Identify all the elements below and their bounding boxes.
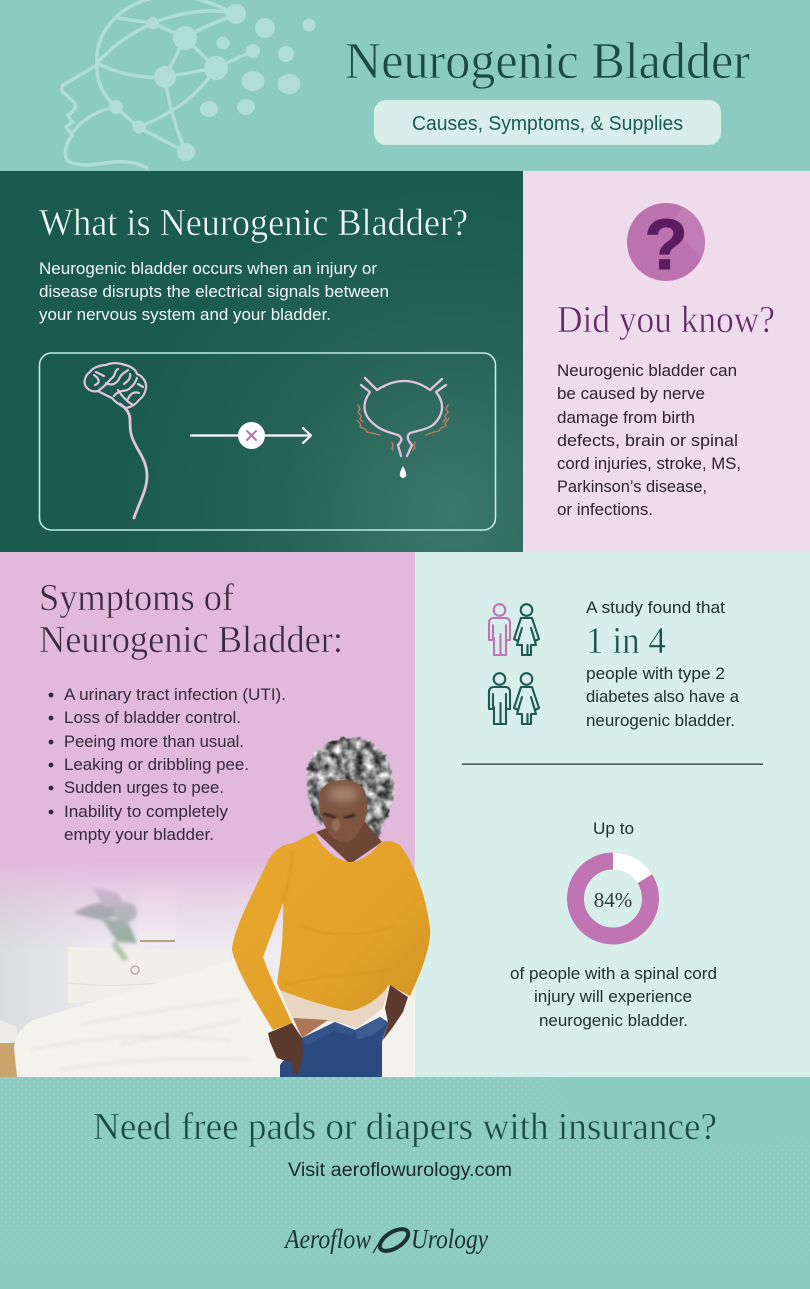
text block: causes <box>557 361 741 519</box>
text block: causes: damage from birth <box>557 408 695 427</box>
logo: Aeroflow Urology: Aeroflow <box>283 1224 371 1254</box>
text block: symptom list: Leaking or dribbling pee. <box>64 755 249 774</box>
diagram box <box>40 353 496 530</box>
text block: symptom list: Peeing more than usual. <box>64 732 244 751</box>
stat: 84 percent: Up to <box>593 819 634 838</box>
heading: Need free pads or diapers with insurance? <box>93 1106 717 1148</box>
text block: symptom list <box>49 685 286 844</box>
icon: leaking bladder <box>357 378 449 478</box>
jeans <box>280 1017 388 1077</box>
text block: definition: your nervous system and your bladder. <box>39 305 331 324</box>
heading: Symptoms of <box>39 577 234 619</box>
panel: did you know <box>523 171 810 552</box>
panel: symptoms <box>0 552 415 1077</box>
subtitle pill: Causes, Symptoms, & Supplies <box>412 113 683 135</box>
donut chart: 84% <box>594 888 632 912</box>
panel: statistics <box>415 552 810 1077</box>
shirt <box>232 833 430 1030</box>
panel: header <box>0 0 810 172</box>
text block: symptom list: Loss of bladder control. <box>64 708 241 727</box>
stat: 1 in 4: diabetes also have a <box>586 687 740 706</box>
photo: woman adjusting jeans <box>232 738 430 1077</box>
icon: one in four people <box>489 604 539 724</box>
icon: brain and spinal cord <box>85 363 147 518</box>
hair <box>308 738 394 850</box>
face <box>319 780 367 842</box>
text block: causes: be caused by nerve <box>557 384 705 403</box>
arrow with blocked signal <box>191 422 311 449</box>
text block: symptom list: A urinary tract infection (UTI). <box>64 685 286 704</box>
stat: 1 in 4: A study found that <box>586 598 725 617</box>
text block: definition: Neurogenic bladder occurs when an injury or <box>39 259 377 278</box>
stat: 1 in 4: 1 in 4 <box>586 620 666 662</box>
right hand <box>383 985 408 1040</box>
text block: definition: disease disrupts the electrical signals between <box>39 282 389 301</box>
text block: symptom list: Inability to completely <box>64 802 228 821</box>
photo background: bedroom <box>0 860 415 1077</box>
icon: question mark <box>627 203 705 285</box>
underwear <box>280 988 388 1028</box>
text block: causes: defects, brain or spinal <box>557 431 738 450</box>
heading <box>39 577 343 661</box>
donut chart <box>576 861 650 936</box>
text block: causes: cord injuries, stroke, MS, <box>557 454 741 473</box>
text block: causes: Parkinson’s disease, <box>557 477 707 496</box>
logo: Aeroflow Urology <box>283 1224 488 1255</box>
logo: Aeroflow Urology: Urology <box>411 1224 488 1254</box>
text block: definition <box>39 259 389 324</box>
left hand <box>268 1023 303 1075</box>
subtitle pill <box>374 100 721 145</box>
stat: 1 in 4 <box>586 598 740 730</box>
stat: 84 percent: neurogenic bladder. <box>539 1011 688 1030</box>
text block: symptom list: Sudden urges to pee. <box>64 778 224 797</box>
stat: 84 percent <box>510 819 717 1030</box>
stat: 84 percent: of people with a spinal cord <box>510 964 717 983</box>
stat: 84 percent: injury will experience <box>534 987 692 1006</box>
text block: symptom list: empty your bladder. <box>64 825 214 844</box>
title: Neurogenic Bladder <box>345 33 750 90</box>
text block: causes: or infections. <box>557 500 653 519</box>
heading: Neurogenic Bladder: <box>39 619 343 661</box>
skin at waist <box>293 1018 328 1038</box>
stat: 1 in 4: people with type 2 <box>586 664 725 683</box>
neck and chest <box>316 822 382 864</box>
text: website: Visit aeroflowurology.com <box>288 1160 512 1181</box>
panel: footer call to action <box>0 1077 810 1254</box>
heading: Did you know? <box>557 299 775 341</box>
icon: head with neural network <box>62 0 315 168</box>
icon: question mark: ? <box>644 206 688 285</box>
heading: What is Neurogenic Bladder? <box>39 202 468 244</box>
panel: what is neurogenic bladder <box>0 171 524 552</box>
stat: 1 in 4: neurogenic bladder. <box>586 711 735 730</box>
text block: causes: Neurogenic bladder can <box>557 361 737 380</box>
